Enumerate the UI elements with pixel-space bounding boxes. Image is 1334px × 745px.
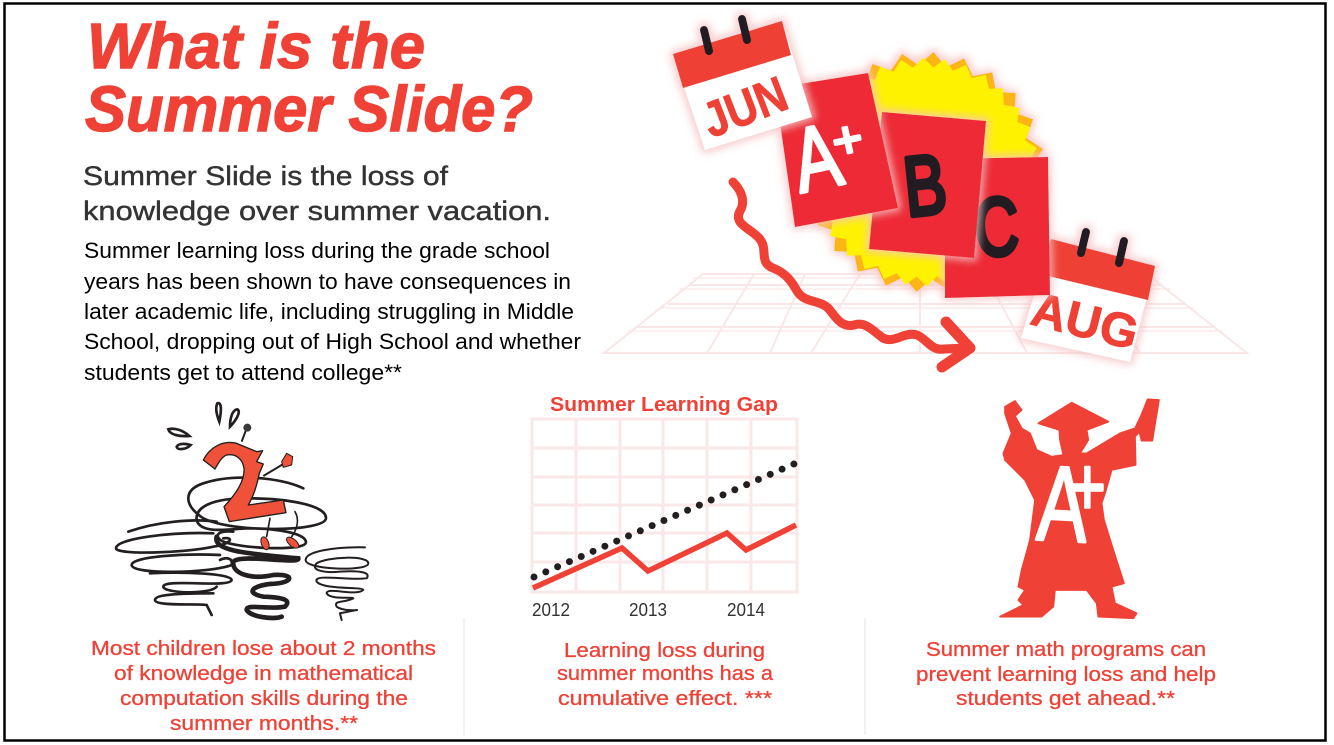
perspective floor grid [604,274,1247,353]
subheading: Summer Slide is the loss of [83,161,449,191]
JUN calendar: JUN [695,66,795,149]
grade card A+ [775,73,898,227]
chart title: Summer Learning Gap [550,394,778,416]
year labels [532,600,765,620]
column dividers [464,618,865,735]
red number 2 character [203,442,286,522]
grade card C: C [972,181,1021,274]
title [85,10,533,145]
year labels: 2012 [532,600,570,620]
wavy arrow from June to August [733,182,970,367]
caption: cumulative effect [557,640,774,710]
A+ on gown: + [1069,441,1106,533]
caption: lost months [91,638,436,735]
chart: Summer Learning Gap [532,394,797,620]
body text: Summer learning loss during the grade school [84,238,550,263]
caption: lost months: Most children lose about 2 months [91,638,436,660]
caption: summer math programs: prevent learning loss and help [916,664,1216,686]
grade card B: B [899,136,951,234]
illustration: graduate silhouette [1000,399,1159,618]
grade card A+: + [827,109,868,172]
caption: lost months: summer months.** [170,713,358,735]
sweat drops [168,403,239,449]
caption: cumulative effect: Learning loss during [564,640,765,662]
grade card A+: A [784,105,850,212]
grade card C [945,157,1050,298]
caption: summer math programs: Summer math programs can [926,639,1206,661]
AUG calendar [1021,232,1155,362]
A+ on gown: A [1034,442,1091,565]
subheading: knowledge over summer vacation. [83,196,551,226]
subheading [83,161,551,226]
dotted trend line [534,464,794,577]
chart grid [532,419,797,592]
character arm, antenna and feet [242,424,301,551]
year labels: 2013 [629,600,667,620]
title: What is the [87,10,425,82]
title: Summer Slide? [85,73,533,145]
caption: summer math programs: students get ahead.** [956,688,1175,710]
illustration: dizzy number 2 on springs [116,403,368,620]
grade card B [869,112,986,258]
caption: cumulative effect: cumulative effect. *** [558,688,772,710]
red learning line [533,525,796,588]
body text: students get to attend college** [84,360,402,385]
spring coils [116,478,368,620]
caption: summer math programs [916,639,1216,710]
caption: lost months: computation skills during the [120,688,408,710]
caption: cumulative effect: summer months has a [557,663,774,685]
body text: later academic life, including struggling in Middle [84,299,574,324]
JUN calendar [673,19,812,150]
year labels: 2014 [727,600,765,620]
caption: lost months: of knowledge in mathematical [114,663,413,685]
body text: years has been shown to have consequences in [84,269,571,294]
AUG calendar: AUG [1026,283,1144,361]
hero illustration: calendars, grades and sun [604,19,1247,367]
body text [84,238,581,385]
body text: School, dropping out of High School and whether [84,329,581,354]
sunburst behind grades [805,52,1045,292]
